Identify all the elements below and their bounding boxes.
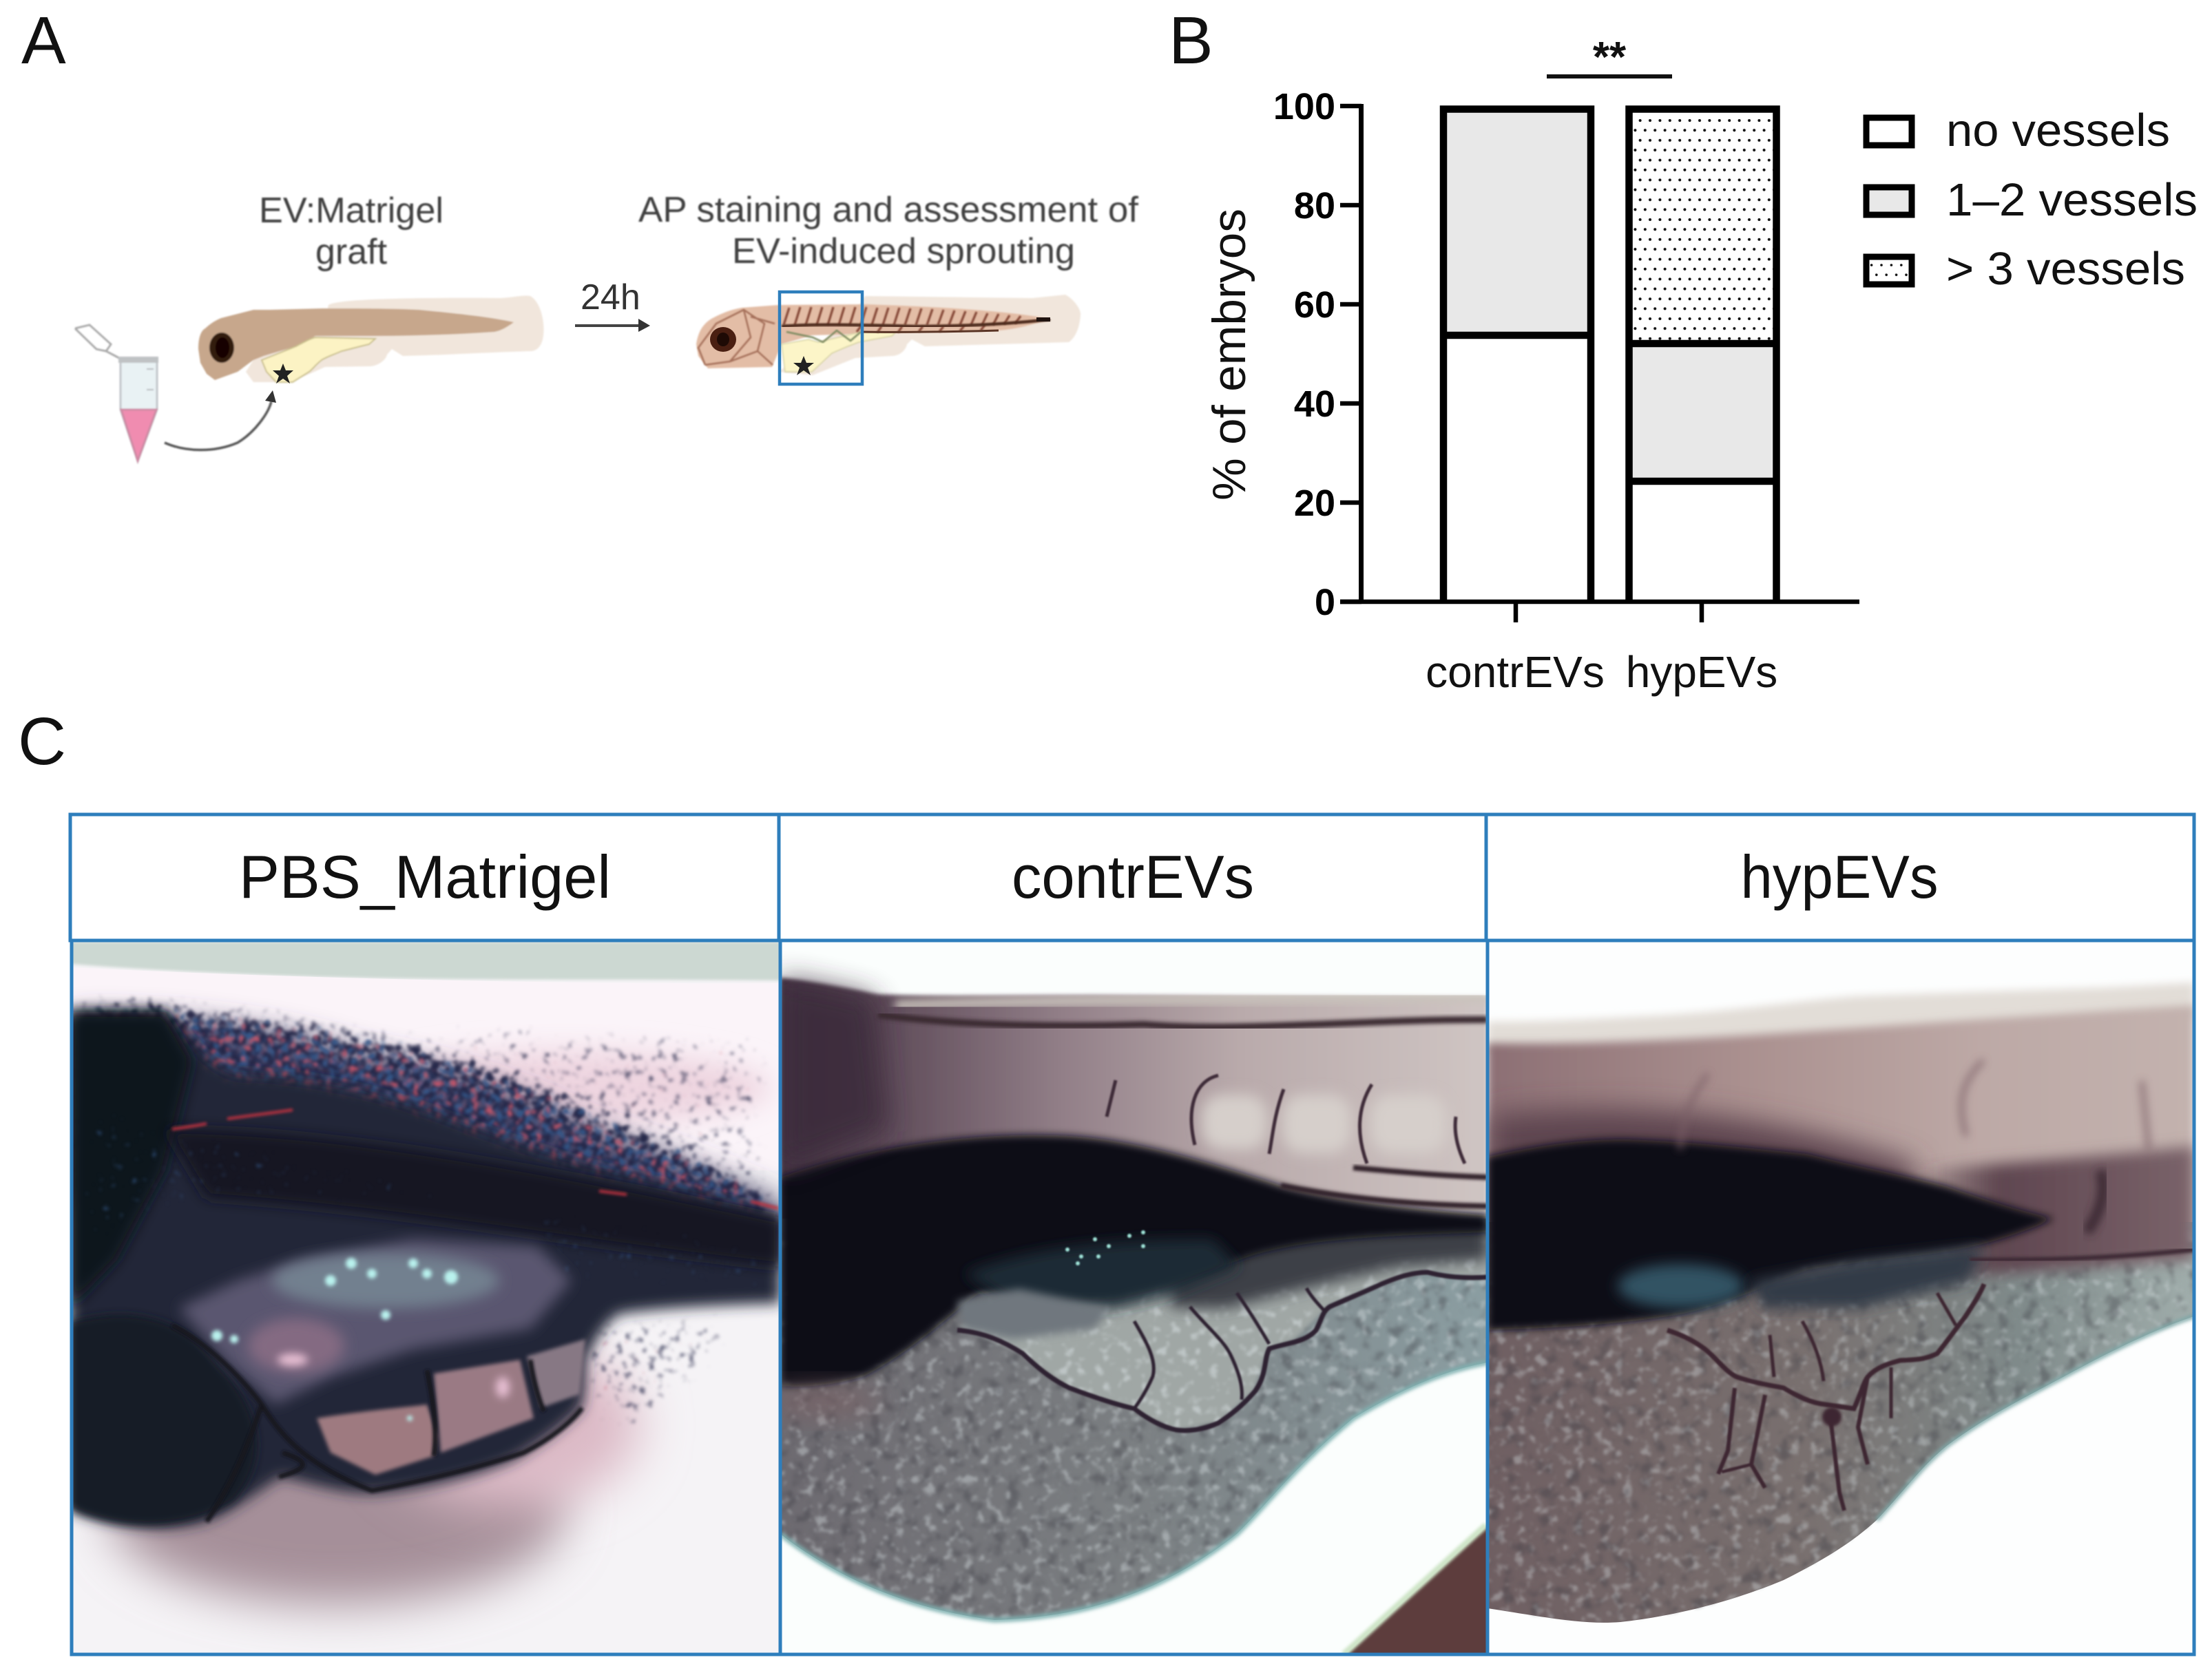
bar: hypEVs — [1629, 109, 1777, 602]
photo: contrEVs embryo — [764, 942, 1488, 1656]
y axis with ticks and values: 60 — [1294, 284, 1335, 326]
column header: contrEVs: contrEVs — [1012, 843, 1254, 911]
icon: graft star on second embryo — [793, 356, 814, 375]
y axis with ticks and values: 80 — [1294, 185, 1335, 227]
icon: zebrafish embryo with graft — [198, 295, 543, 382]
label: EV:Matrigel graft — [259, 191, 444, 272]
column header: hypEVs: hypEVs — [1741, 843, 1938, 911]
icon: microtube with pink liquid — [75, 325, 158, 461]
photo: PBS_Matrigel embryo — [70, 942, 780, 1656]
y axis with ticks and values: 20 — [1294, 483, 1335, 524]
significance marker: ** — [1593, 34, 1627, 81]
label: AP staining and assessment — [638, 190, 1139, 271]
legend — [1866, 105, 2198, 295]
y axis with ticks and values: 40 — [1294, 383, 1335, 425]
legend item: 1-2 vessels: 1–2 vessels — [1946, 174, 2198, 226]
icon: graft star on first embryo — [273, 364, 293, 383]
x label: hypEVs: hypEVs — [1626, 647, 1777, 697]
label: EV:Matrigel graft: graft — [315, 232, 388, 272]
panel C: microscopy image grid — [70, 814, 2194, 1656]
panel letter A: A — [21, 3, 66, 78]
y axis with ticks and values: 100 — [1273, 86, 1335, 127]
arrow: curved injection arrow — [165, 390, 276, 450]
legend item: no vessels: no vessels — [1946, 105, 2170, 156]
label: AP staining and assessment: EV-induced sprouting — [732, 231, 1075, 271]
significance marker — [1547, 34, 1672, 81]
x label: contrEVs: contrEVs — [1426, 647, 1605, 697]
legend item: more than 3 vessels: > 3 vessels — [1946, 243, 2185, 295]
y axis title: % of embryos — [1203, 209, 1255, 501]
label: 24h: 24h — [581, 277, 640, 317]
box: imaged region — [780, 292, 862, 384]
panel letter B: B — [1169, 3, 1213, 78]
icon: stained zebrafish embryo with vessels — [696, 295, 1081, 375]
arrow: 24h progression — [575, 319, 650, 332]
header grid with blue borders — [70, 814, 2194, 1654]
photo: hypEVs embryo — [1489, 979, 2193, 1623]
x axis with ticks — [1340, 602, 1859, 622]
label: EV:Matrigel graft: EV:Matrigel — [259, 191, 444, 231]
bar: contrEVs — [1443, 109, 1591, 602]
y axis with ticks and values: 0 — [1315, 582, 1335, 623]
y axis with ticks and values — [1273, 86, 1361, 623]
column header: PBS_Matrigel: PBS_Matrigel — [239, 843, 611, 911]
panel A: experimental workflow — [75, 190, 1139, 461]
panel B: stacked bar chart — [1203, 34, 2198, 697]
label: AP staining and assessment: AP staining and assessment of — [638, 190, 1139, 230]
panel letter C: C — [18, 704, 66, 779]
